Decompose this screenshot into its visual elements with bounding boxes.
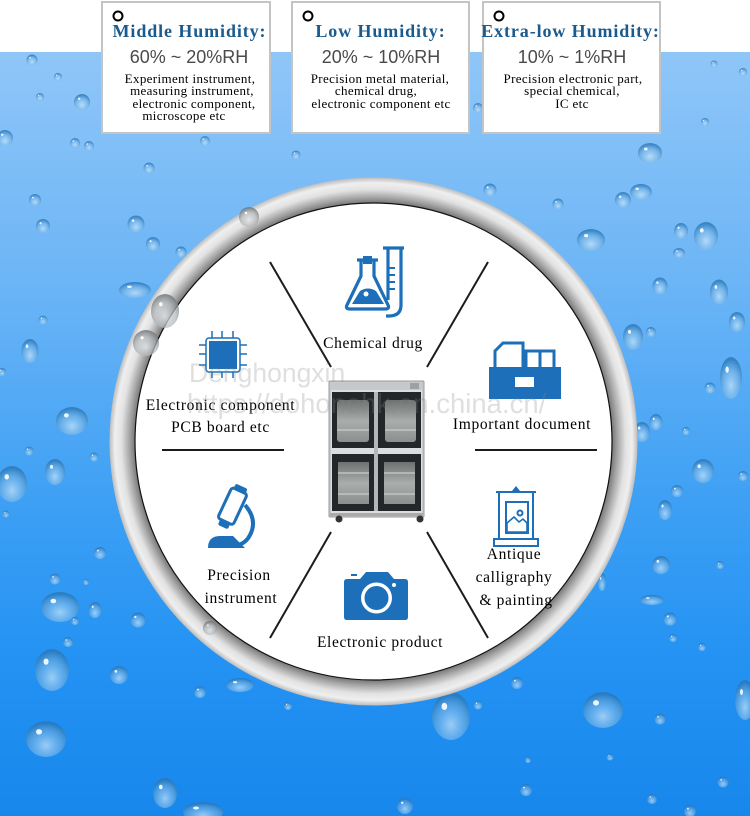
top band behind cards — [0, 0, 750, 52]
heading: Middle Humidity: — [113, 21, 266, 41]
bullet — [114, 12, 122, 20]
bullet — [304, 12, 312, 20]
card: middle humidity — [102, 2, 270, 133]
label: precision instrument: instrument — [205, 590, 277, 607]
uses: Precision metal material, — [311, 71, 449, 86]
range: 20% ~ 10%RH — [322, 47, 440, 67]
watermark: https://dohonehk.en.china.cn/ — [187, 388, 547, 419]
watermark — [187, 358, 547, 419]
card: extra-low humidity — [481, 2, 660, 133]
icon: document box — [489, 343, 561, 399]
watermark: Denghongxin — [189, 358, 345, 388]
label: antique calligraphy and painting: calligraphy — [476, 569, 552, 586]
label: antique calligraphy and painting: Antique — [487, 546, 541, 563]
ring — [110, 178, 638, 706]
label: electronic component: Electronic component — [146, 397, 295, 414]
uses: special chemical, — [524, 83, 620, 98]
uses: measuring instrument, — [130, 83, 254, 98]
icon: framed painting — [494, 486, 538, 546]
uses: Precision electronic part, — [504, 71, 642, 86]
icon: chip — [199, 331, 247, 378]
card: low humidity — [292, 2, 469, 133]
dividing lines — [162, 262, 597, 638]
uses: electronic component etc — [311, 96, 451, 111]
heading: Extra-low Humidity: — [481, 21, 660, 41]
icon: microscope — [208, 483, 253, 548]
label: electronic product: Electronic product — [317, 634, 443, 651]
icon: flask and test tube — [346, 248, 404, 316]
uses: microscope etc — [142, 108, 226, 123]
label: antique calligraphy and painting: & painting — [479, 592, 553, 609]
cabinet — [329, 381, 424, 522]
icon: camera — [344, 572, 408, 620]
label: precision instrument: Precision — [207, 567, 271, 584]
label: important document: Important document — [453, 416, 591, 433]
label: electronic component: PCB board etc — [171, 419, 270, 436]
uses: chemical drug, — [335, 83, 417, 98]
bullet — [494, 12, 504, 20]
range: 10% ~ 1%RH — [518, 47, 626, 67]
label: chemical drug: Chemical drug — [323, 335, 423, 352]
range: 60% ~ 20%RH — [130, 47, 248, 67]
heading: Low Humidity: — [315, 21, 446, 41]
uses: Experiment instrument, — [125, 71, 255, 86]
uses: IC etc — [555, 96, 589, 111]
uses: electronic component, — [132, 96, 256, 111]
